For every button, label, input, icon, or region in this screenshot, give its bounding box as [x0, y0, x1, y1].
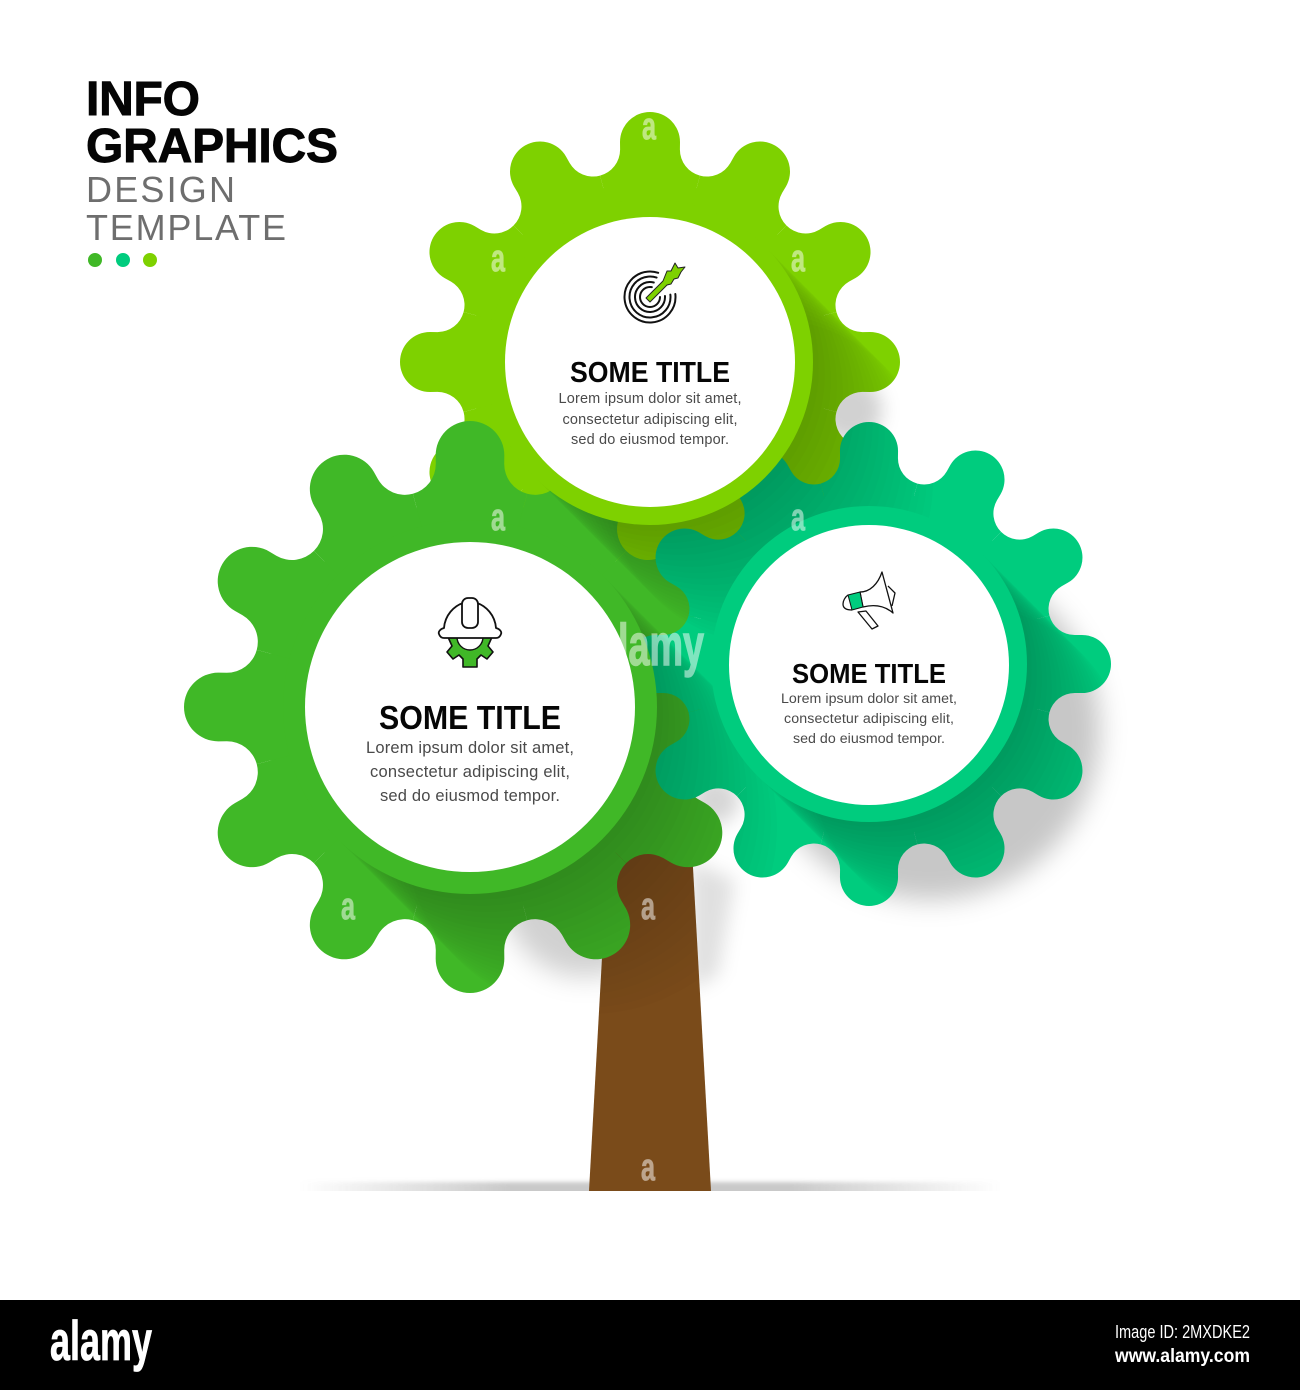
long shadow: teal ring: [771, 564, 1101, 896]
watermark: a: [491, 238, 506, 280]
body text: [781, 691, 957, 747]
watermark: a: [641, 886, 656, 928]
watermark: [341, 106, 806, 1189]
footer logo: alamy: [50, 1309, 152, 1372]
soft cast shadows on background: [503, 378, 1100, 990]
watermark: a: [791, 238, 806, 280]
website: www.alamy.com: [1114, 1346, 1250, 1367]
body text: consectetur adipiscing elit,: [562, 412, 738, 428]
ground shadow: [332, 1180, 968, 1191]
subheading: design template: [86, 169, 286, 248]
watermark: a: [641, 1147, 656, 1189]
body text: Lorem ipsum dolor sit amet,: [781, 691, 957, 707]
subheading: design template: DESIGN: [86, 169, 235, 210]
watermark: a: [491, 497, 506, 539]
body text: sed do eiusmod tempor.: [380, 787, 560, 805]
watermark: a: [642, 106, 657, 148]
gear: teal: [627, 422, 1111, 906]
title: SOME TITLE: [792, 658, 946, 689]
green ring: [283, 520, 657, 894]
lime ring: [487, 199, 813, 525]
white disc: [729, 525, 1009, 805]
icon: megaphone: [843, 572, 895, 629]
watermark: lamy: [618, 613, 704, 678]
image id: Image ID: 2MXDKE2: [1115, 1322, 1250, 1342]
heading: info graphics: INFO: [86, 73, 200, 126]
white disc: [505, 217, 795, 507]
title: SOME TITLE: [570, 357, 730, 389]
icon: helmet with gear: [439, 598, 501, 667]
panel: green circle: [283, 520, 657, 894]
long shadow: lime ring: [493, 205, 933, 645]
title: SOME TITLE: [379, 699, 561, 736]
gear: green: [184, 421, 756, 993]
subheading: design template: TEMPLATE: [86, 207, 286, 248]
body text: Lorem ipsum dolor sit amet,: [366, 739, 574, 757]
body text: [366, 739, 574, 805]
long shadows falling on gears and trunk: [353, 260, 1101, 984]
heading: info graphics: [86, 73, 338, 173]
body text: sed do eiusmod tempor.: [571, 432, 729, 448]
white disc: [305, 542, 635, 872]
footer bar: [0, 1300, 1300, 1390]
body text: consectetur adipiscing elit,: [370, 763, 570, 781]
body text: sed do eiusmod tempor.: [793, 731, 945, 747]
tree trunk: [589, 850, 711, 1191]
title block: [86, 73, 338, 267]
panel: lime circle: [487, 199, 813, 525]
heading: info graphics: GRAPHICS: [86, 120, 338, 173]
watermark: a: [791, 497, 806, 539]
teal ring: [711, 506, 1027, 822]
icon: target with arrow: [622, 263, 685, 325]
watermark: a: [341, 886, 356, 928]
three colour dots: [88, 253, 157, 267]
panel: teal circle: [711, 506, 1027, 822]
body text: consectetur adipiscing elit,: [784, 711, 954, 727]
long shadow: green ring: [289, 526, 777, 1014]
body text: Lorem ipsum dolor sit amet,: [558, 391, 742, 407]
body text: [558, 391, 742, 448]
gear: lime: [400, 112, 900, 612]
